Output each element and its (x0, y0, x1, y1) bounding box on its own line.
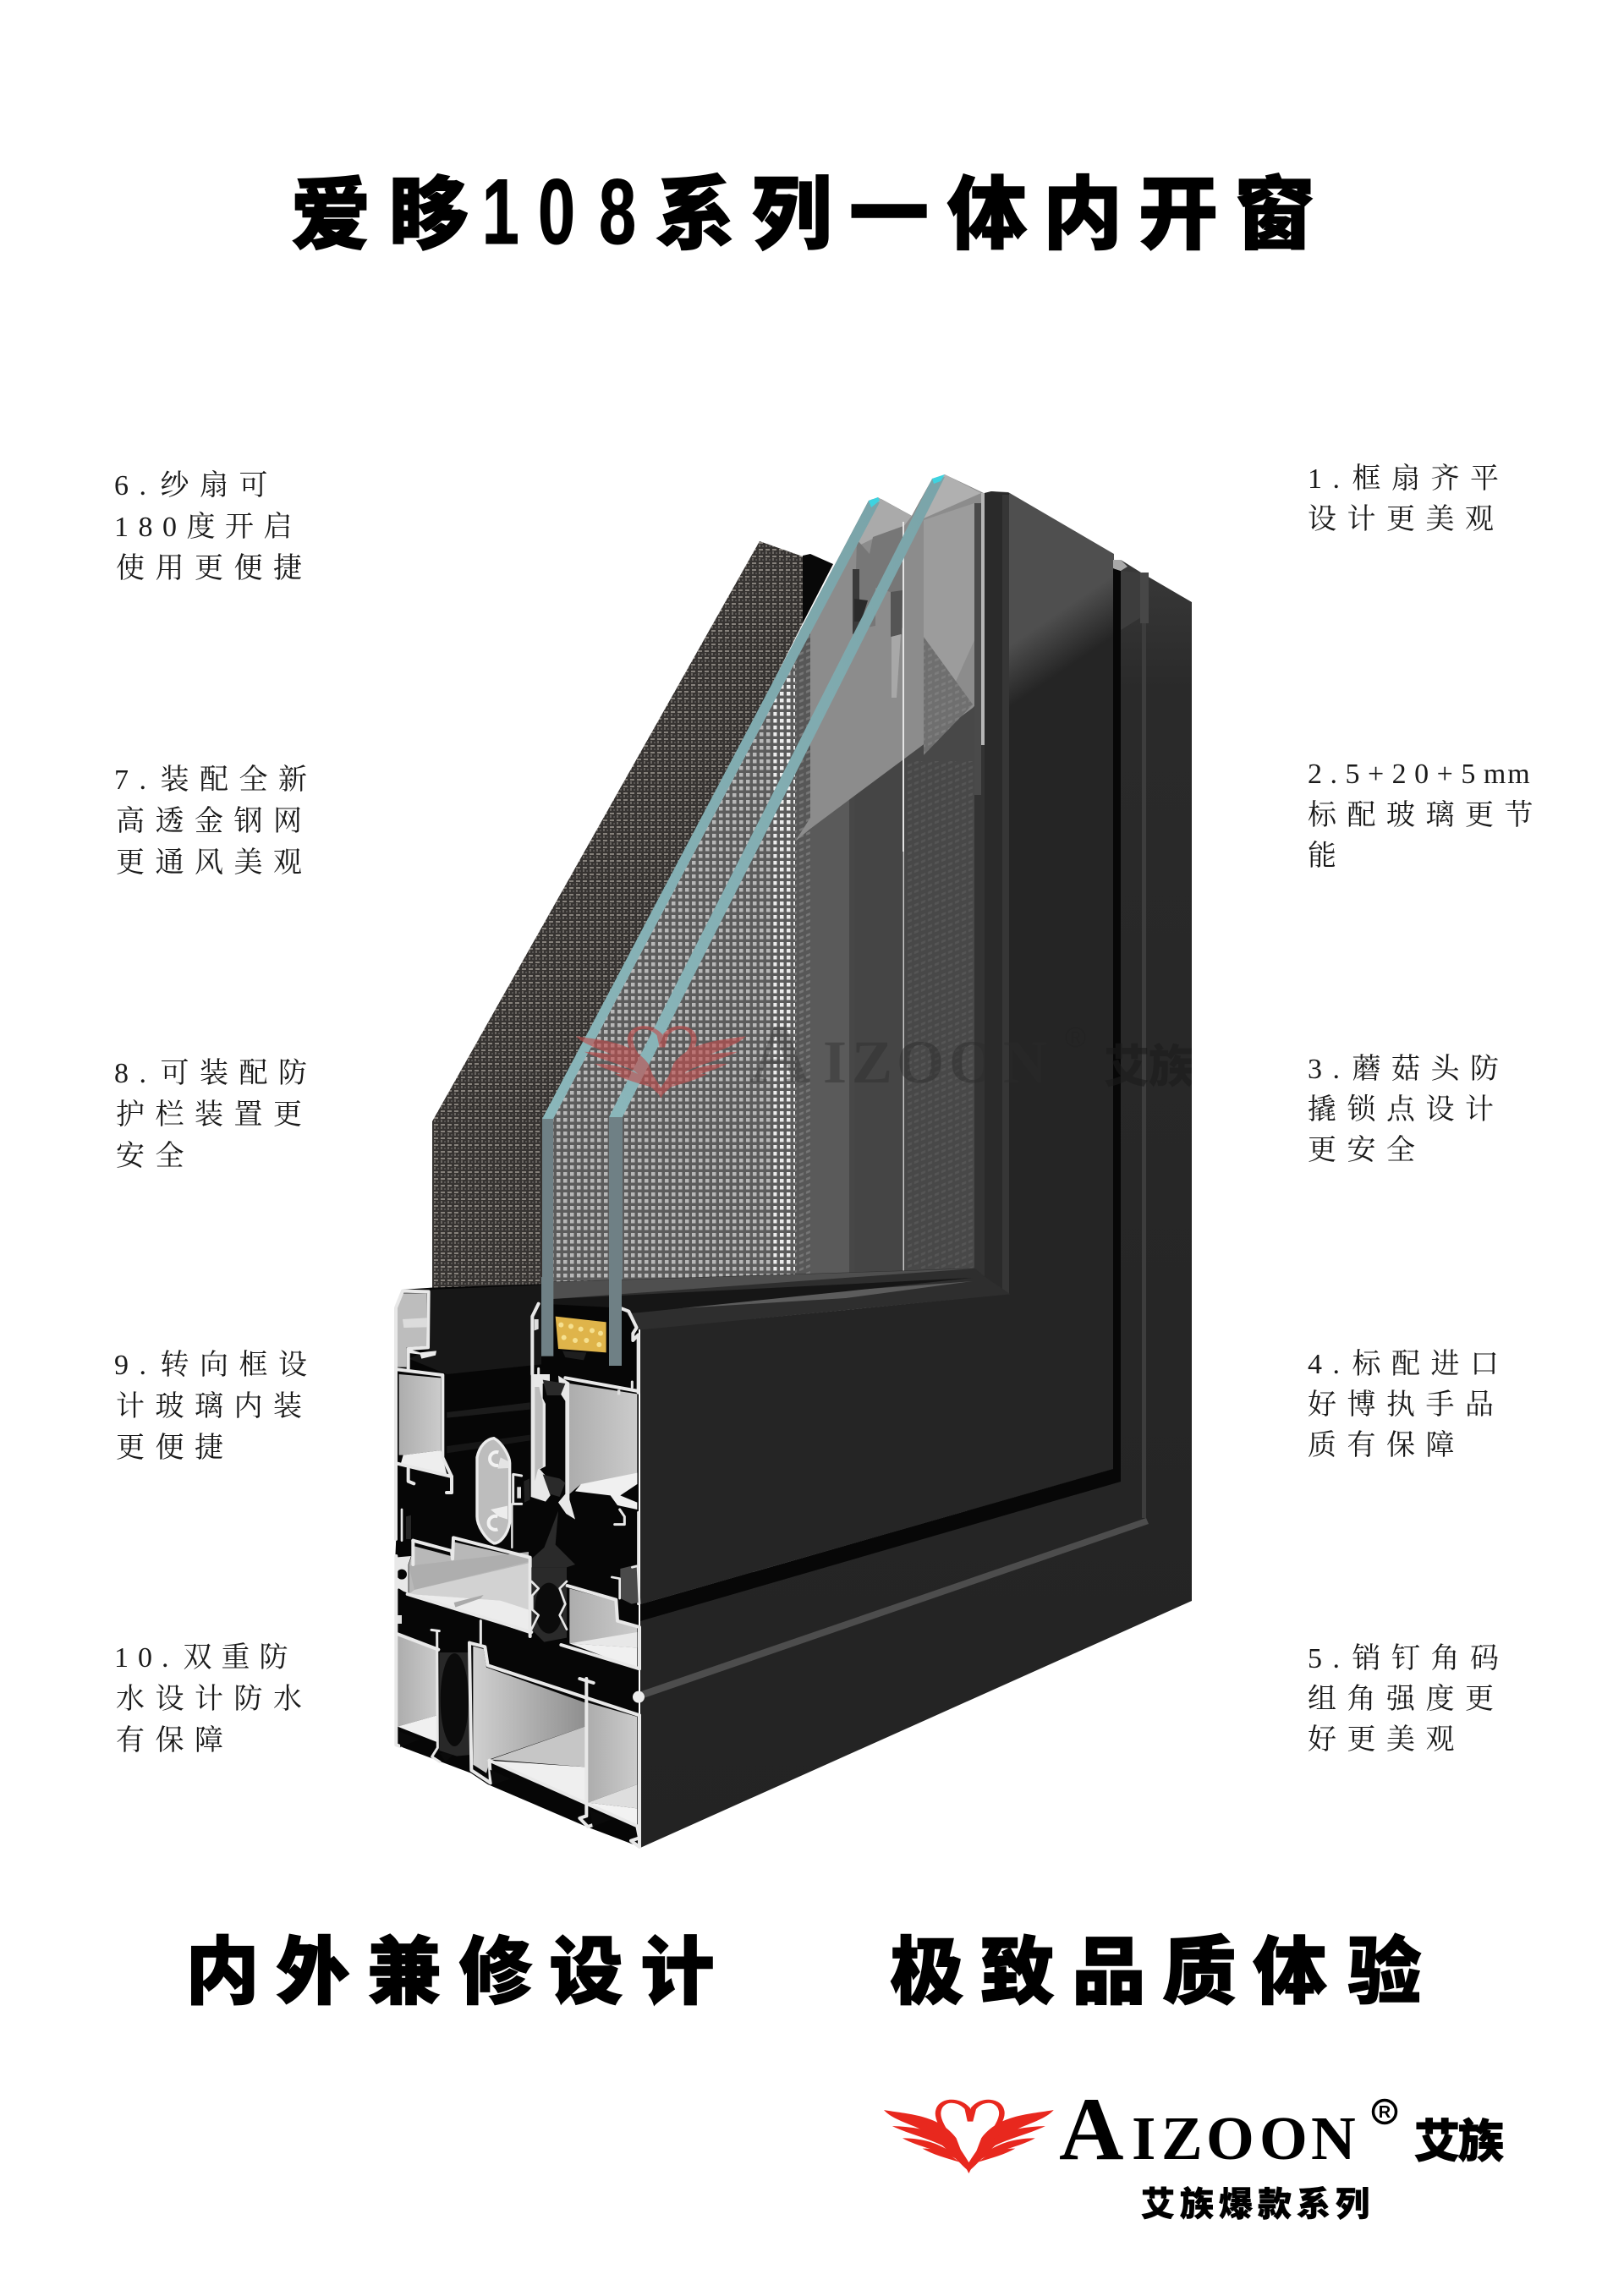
sash fitting clip (512, 1474, 530, 1548)
feature 9: 更便捷 (116, 1432, 233, 1464)
thermal break strip lower (439, 1652, 471, 1756)
insect screen mesh (432, 541, 803, 1290)
upper glass reflection (795, 474, 985, 852)
feature 2 (1308, 759, 1544, 872)
feature 5: 好更美观 (1308, 1723, 1465, 1756)
registered mark (1374, 2101, 1396, 2123)
feature 4: 4.标配进口 (1308, 1348, 1509, 1380)
feature 5 (1308, 1642, 1509, 1756)
gasket foam strip (556, 1317, 606, 1360)
feature 9: 9.转向框设 (114, 1349, 318, 1381)
base frame upper chamber (408, 1537, 531, 1636)
feature 5: 组角强度更 (1308, 1683, 1504, 1715)
sash glass clamp walls (532, 1304, 639, 1393)
wordmark AIZOON: A (1059, 2080, 1124, 2178)
feature 2: 能 (1308, 840, 1347, 872)
feature 1: 1.框扇齐平 (1308, 463, 1509, 495)
feature 8 (114, 1057, 318, 1172)
sash left narrow chamber (531, 1374, 551, 1502)
feature 8: 8.可装配防 (114, 1057, 318, 1089)
feature 8: 护栏装置更 (116, 1099, 313, 1131)
frame groove stripe (641, 573, 1149, 1699)
left feature list (114, 469, 318, 1756)
base frame right chamber (561, 1564, 639, 1669)
bottom glazing bead (553, 1269, 1009, 1329)
glass pane lower ends (541, 1277, 622, 1366)
right feature list (1308, 463, 1544, 1756)
feature 6 (114, 469, 313, 584)
interior seen through glass (553, 474, 985, 1290)
feature 1 (1308, 463, 1509, 535)
feature 4: 好博执手品 (1308, 1389, 1504, 1421)
brand watermark: 艾族 (1104, 1042, 1194, 1093)
feature 3: 更安全 (1308, 1134, 1426, 1166)
base frame end clip (395, 1556, 411, 1624)
feature 7: 更通风美观 (116, 847, 313, 879)
black screen frame block (803, 554, 833, 623)
feature 3: 3.蘑菇头防 (1308, 1053, 1509, 1085)
slogan right: 极致品质体验 (890, 1932, 1421, 2014)
slogan left: 内外兼修设计 (186, 1932, 714, 2014)
feature 9: 计玻璃内装 (116, 1390, 313, 1422)
icon: red swan wings heart (884, 2101, 1054, 2171)
registered mark: R (1379, 2103, 1391, 2122)
title: 爱眵系列一体内开窗 (291, 170, 1314, 259)
window cross-section product illustration (395, 474, 1194, 1848)
feature 9 (114, 1349, 318, 1464)
brand watermark: A (749, 1007, 810, 1101)
feature 2: 标配玻璃更节 (1308, 799, 1544, 831)
inner glass pane (542, 497, 880, 1356)
series tagline: 艾族爆款系列 (1141, 2186, 1369, 2223)
wordmark AIZOON: IZOON (1132, 2104, 1356, 2173)
handle lock oval (477, 1438, 510, 1543)
feature 10: 有保障 (116, 1724, 233, 1756)
cavity black base (395, 1284, 639, 1846)
frame side upper light (1121, 571, 1141, 630)
feature 3: 撬锁点设计 (1308, 1093, 1504, 1126)
feature 7 (114, 764, 318, 879)
sash vertical bead (985, 491, 1009, 1294)
hardware seen through glass (853, 526, 903, 698)
interior dark columns (810, 495, 985, 1290)
feature 3 (1308, 1053, 1509, 1166)
feature 10 (114, 1641, 313, 1756)
thermal break strip upper (531, 1380, 575, 1567)
feature 6: 使用更便捷 (116, 552, 313, 584)
brand logo (884, 2080, 1504, 2223)
feature 6: 6.纱扇可 (114, 469, 278, 501)
feature 10: 水设计防水 (116, 1683, 313, 1715)
extruded profile cut face (395, 1277, 645, 1847)
feature 6: 180度开启 (114, 511, 302, 543)
feature 8: 安全 (116, 1140, 195, 1172)
base frame lower-left chamber (396, 1556, 480, 1762)
base frame main lower chamber (469, 1643, 645, 1847)
feature 5: 5.销钉角码 (1308, 1642, 1509, 1674)
brand watermark: IZOON (823, 1028, 1047, 1096)
feature 7: 7.装配全新 (114, 764, 318, 796)
feature 4: 质有保障 (1308, 1429, 1465, 1461)
feature 10: 10.双重防 (114, 1641, 298, 1674)
thermal break strip middle (531, 1567, 567, 1642)
aluminium frame front face (553, 491, 1192, 1848)
sash main chamber (558, 1376, 639, 1604)
screen frame upper chamber (396, 1291, 452, 1541)
outer glass pane (609, 474, 945, 1367)
brand name: 艾族 (1414, 2117, 1504, 2167)
brand watermark: ® (1065, 1022, 1086, 1054)
lower section of profile (395, 1537, 645, 1847)
glass top prisms (924, 474, 981, 518)
feature 2: 2.5+20+5mm (1308, 759, 1532, 790)
wordmark AIZOON (1059, 2080, 1356, 2178)
feature 4 (1308, 1348, 1509, 1461)
perforated sash zone (553, 611, 810, 1282)
title: 108 (482, 160, 636, 264)
shadow slit between sash and frame (640, 568, 1121, 1621)
feature 7: 高透金钢网 (116, 805, 313, 837)
brand watermark (576, 1026, 1146, 1099)
feature 1: 设计更美观 (1308, 503, 1504, 535)
